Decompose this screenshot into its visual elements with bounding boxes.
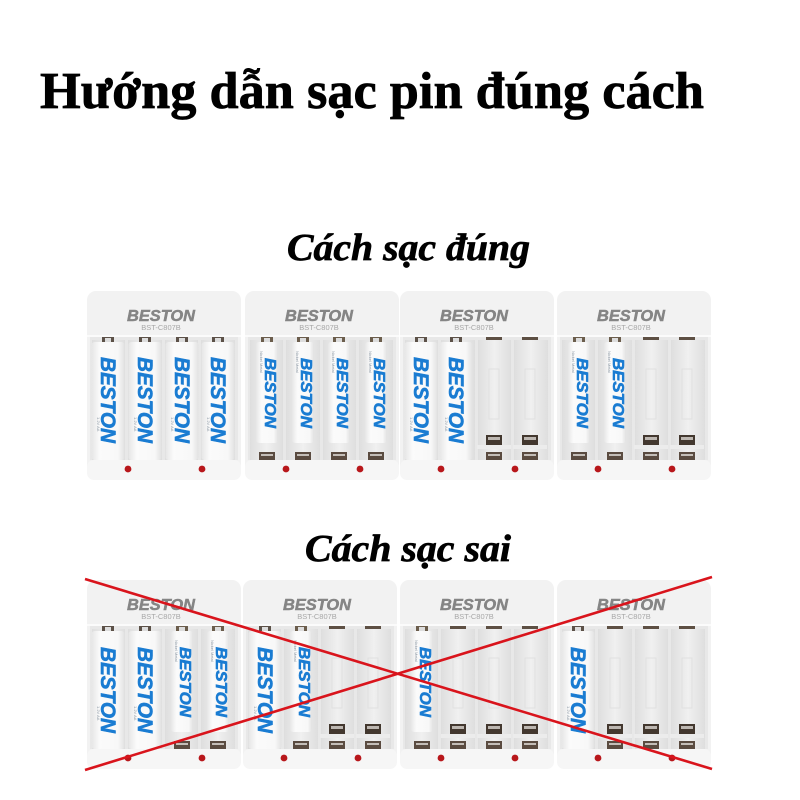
battery: AAA slot 3 [328,337,350,460]
battery: AA slot 2: 1.2V AA [133,706,138,721]
battery: AAA slot 3: BESTON [333,358,350,428]
charger: correct, two AA: BST-C807B [454,323,494,332]
battery: AA slot 3: 1.2V AA [170,417,175,432]
charger: wrong, one AA and one AAA: BST-C807B [297,612,337,621]
battery: AAA slot 2: BESTON [297,358,314,428]
battery: AAA slot 4: BESTON [370,358,387,428]
battery: AAA slot 4: Nickel Metal [368,351,373,373]
battery: AA slot 2 [128,626,162,749]
battery: AAA slot 4 [207,626,229,749]
charger: correct, two AAA [557,291,711,480]
charger: wrong, mixed AA and AAA: BESTON [127,597,195,614]
charger: correct, four AAA: BESTON [285,308,353,325]
battery: AAA slot 3: Nickel Metal [331,351,336,373]
battery: AAA slot 2: Nickel Metal [293,640,298,662]
charger: correct, two AA [400,291,554,480]
battery: AAA slot 2: BESTON [295,647,312,717]
charger: correct, four AAA [245,291,399,480]
battery: AAA slot 2: Nickel Metal [607,351,612,373]
battery: AA slot 1 [404,337,438,460]
charger: wrong, mixed AA and AAA [87,580,241,769]
battery: AA slot 1: BESTON [96,357,119,444]
charger: wrong, one AAA [400,580,554,769]
red cross over wrong chargers [85,577,712,770]
battery: AA slot 1 [562,626,594,749]
battery: AAA slot 2: Nickel Metal [295,351,300,373]
battery: AAA slot 3: Nickel Metal [174,640,179,662]
charger: correct, four AA: BESTON [127,308,195,325]
empty slots [320,626,390,749]
charger: wrong, one AAA: BESTON [440,597,508,614]
battery: AA slot 3 [166,337,198,460]
battery: AA slot 2: BESTON [444,357,467,444]
battery: AA slot 4: BESTON [206,357,229,444]
charger: wrong, mixed AA and AAA: BST-C807B [141,612,181,621]
battery: AA slot 2: 1.2V AA [133,417,138,432]
battery: AA slot 2: BESTON [133,647,156,734]
battery: AAA slot 1: Nickel Metal [414,640,419,662]
charger: wrong, one AA: BESTON [597,597,665,614]
battery: AAA slot 1: BESTON [261,358,278,428]
empty slots [477,337,547,460]
battery: AAA slot 3: BESTON [176,647,193,717]
battery: AAA slot 1: BESTON [416,647,433,717]
charger: wrong, one AA and one AAA [243,580,397,769]
battery: AA slot 1: 1.2V AA [96,417,101,432]
heading: correct charging: Cách sạc đúng [287,227,530,269]
battery: AAA slot 2 [292,337,314,460]
battery: AA slot 4 [202,337,234,460]
battery: AA slot 1 [92,626,124,749]
battery: AA slot 1: 1.2V AA [409,417,414,432]
battery: AA slot 1 [92,337,124,460]
battery: AAA slot 1: Nickel Metal [259,351,264,373]
battery: AAA slot 1 [568,337,590,460]
battery: AAA slot 1 [256,337,278,460]
battery: AAA slot 2 [604,337,626,460]
charger: correct, two AAA: BESTON [597,308,665,325]
battery: AA slot 2 [128,337,162,460]
battery: AAA slot 3 [171,626,193,749]
battery: AA slot 1: BESTON [96,647,119,734]
battery: AA slot 4: 1.2V AA [206,417,211,432]
battery: AA slot 1: BESTON [253,647,276,734]
battery: AA slot 1: BESTON [409,357,432,444]
charger: wrong, one AA and one AAA: BESTON [283,597,351,614]
charger: wrong, one AA: BST-C807B [611,612,651,621]
battery: AA slot 2: 1.2V AA [444,417,449,432]
battery: AA slot 1: 1.2V AA [253,706,258,721]
battery: AAA slot 1: BESTON [573,358,590,428]
charger: correct, two AAA: BST-C807B [611,323,651,332]
charger: wrong, one AA [557,580,711,769]
empty slots [598,626,704,749]
empty slots [441,626,547,749]
title: Hướng dẫn sạc pin đúng cách [40,63,704,120]
battery: AA slot 1: 1.2V AA [566,706,571,721]
charger: correct, two AA: BESTON [440,308,508,325]
battery: AA slot 1: BESTON [566,647,589,734]
battery: AAA slot 2: BESTON [609,358,626,428]
battery: AAA slot 4: BESTON [212,647,229,717]
charger: correct, four AA: BST-C807B [141,323,181,332]
charger: correct, four AA [87,291,241,480]
heading: wrong charging: Cách sạc sai [305,528,511,570]
battery: AA slot 2 [440,337,472,460]
empty slots [634,337,704,460]
battery: AAA slot 2 [290,626,312,749]
battery: AA slot 1: 1.2V AA [96,706,101,721]
battery: AAA slot 1 [411,626,433,749]
battery: AAA slot 4: Nickel Metal [210,640,215,662]
battery: AAA slot 1: Nickel Metal [571,351,576,373]
battery: AA slot 3: BESTON [170,357,193,444]
battery: AAA slot 4 [365,337,387,460]
battery: AA slot 2: BESTON [133,357,156,444]
battery: AA slot 1 [248,626,282,749]
charger: correct, four AAA: BST-C807B [299,323,339,332]
charger: wrong, one AAA: BST-C807B [454,612,494,621]
